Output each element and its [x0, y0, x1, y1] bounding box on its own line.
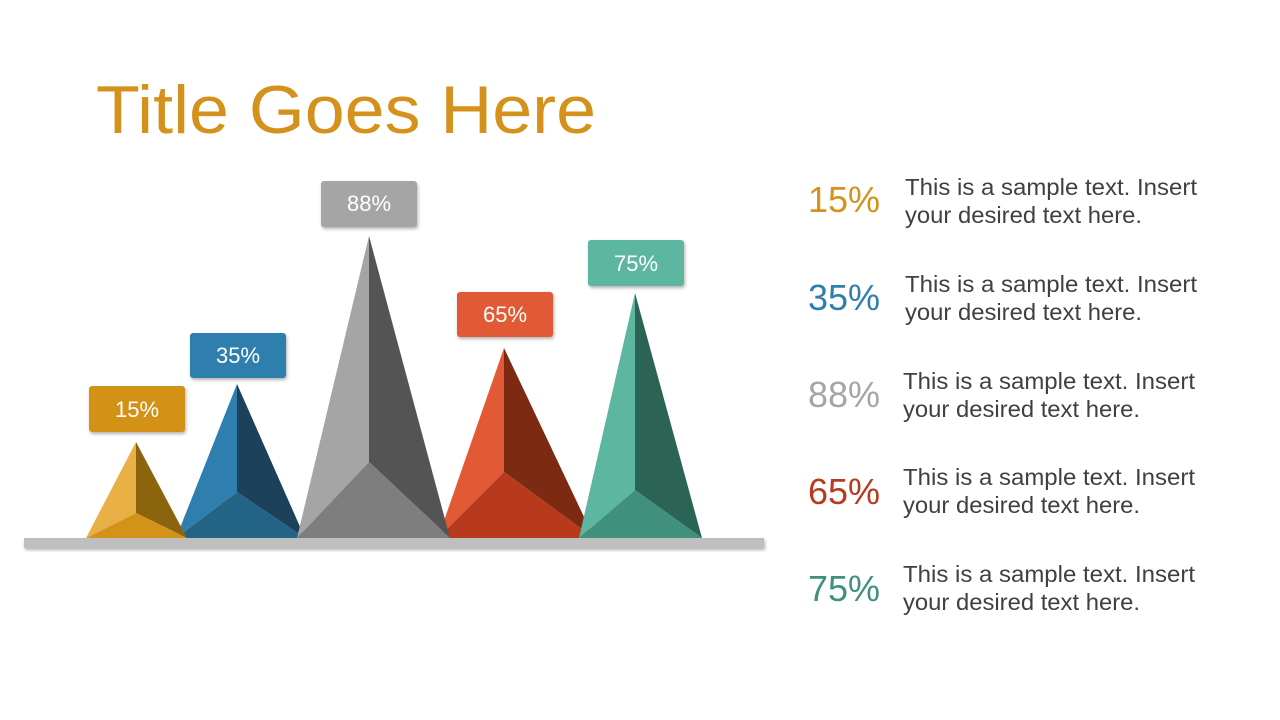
- pyramid: 35% blue: [176, 384, 305, 538]
- legend item 75%: your desired text here.: [903, 589, 1140, 615]
- pyramid: 88% gray: [297, 236, 450, 538]
- legend item 15%: your desired text here.: [905, 202, 1142, 228]
- label: 35%: 35%: [216, 343, 260, 368]
- legend item 88%: [808, 368, 1195, 422]
- pyramid: 75% teal: [579, 293, 702, 538]
- label: 88%: 88%: [347, 191, 391, 216]
- legend item 88%: 88%: [808, 374, 880, 415]
- legend item 88%: This is a sample text. Insert: [903, 368, 1195, 394]
- label: 75%: 75%: [614, 251, 658, 276]
- legend item 35%: your desired text here.: [905, 299, 1142, 325]
- pyramid: 65% red: [438, 348, 594, 538]
- legend item 88%: your desired text here.: [903, 396, 1140, 422]
- label: 65%: 65%: [483, 302, 527, 327]
- legend item 35%: [808, 271, 1197, 325]
- label: 75%: [588, 240, 684, 286]
- legend item 75%: [808, 561, 1195, 615]
- legend item 35%: 35%: [808, 277, 880, 318]
- label: 88%: [321, 181, 417, 227]
- legend item 15%: [808, 174, 1197, 228]
- legend item 65%: [808, 464, 1195, 518]
- legend item 15%: This is a sample text. Insert: [905, 174, 1197, 200]
- label: 35%: [190, 333, 286, 378]
- pyramid: 15% yellow: [86, 442, 187, 538]
- label: 65%: [457, 292, 553, 337]
- legend item 65%: 65%: [808, 471, 880, 512]
- title: Title Goes Here: [96, 72, 596, 148]
- base bar: [24, 538, 764, 548]
- legend item 65%: This is a sample text. Insert: [903, 464, 1195, 490]
- legend item 75%: 75%: [808, 568, 880, 609]
- legend item 75%: This is a sample text. Insert: [903, 561, 1195, 587]
- legend item 65%: your desired text here.: [903, 492, 1140, 518]
- label: 15%: [89, 386, 185, 432]
- legend item 15%: 15%: [808, 179, 880, 220]
- label: 15%: 15%: [115, 397, 159, 422]
- legend item 35%: This is a sample text. Insert: [905, 271, 1197, 297]
